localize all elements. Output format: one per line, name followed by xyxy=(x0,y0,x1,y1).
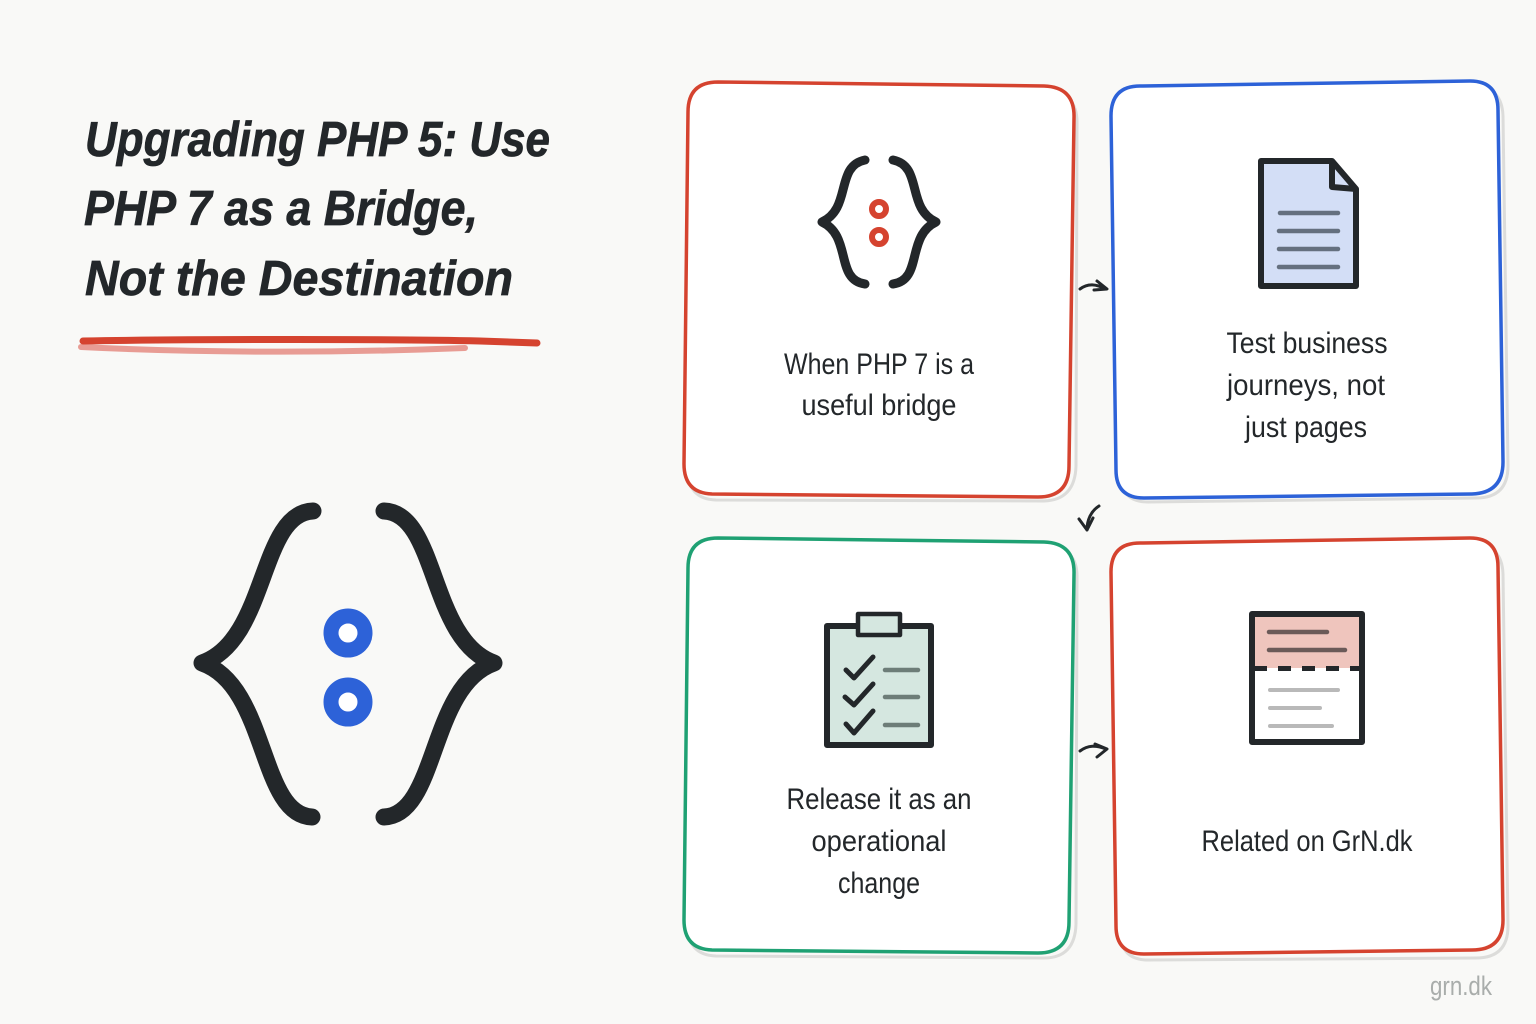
title: PHP 7 as a Bridge, xyxy=(84,182,478,236)
panel: when PHP 7 is a useful bridge xyxy=(684,82,1077,501)
title xyxy=(84,113,550,306)
icon: page split above the fold xyxy=(1252,614,1362,742)
icon: braces with red colon xyxy=(822,160,936,284)
caption xyxy=(786,783,972,900)
arrow: bottom row xyxy=(1080,744,1107,757)
caption: When PHP 7 is a xyxy=(784,348,974,381)
caption: operational xyxy=(812,825,946,858)
title: Not the Destination xyxy=(85,252,513,306)
caption: change xyxy=(838,867,920,900)
arrow: top row xyxy=(1080,281,1107,290)
caption: useful bridge xyxy=(802,389,956,422)
caption xyxy=(1226,327,1388,444)
caption: just pages xyxy=(1244,411,1367,444)
title underline xyxy=(81,340,537,352)
title: Upgrading PHP 5: Use xyxy=(85,113,550,167)
caption: journeys, not xyxy=(1226,369,1386,402)
caption: Related on GrN.dk xyxy=(1202,825,1413,858)
panel: release as operational change xyxy=(684,538,1077,958)
icon: checklist clipboard xyxy=(827,614,931,745)
caption xyxy=(784,348,974,422)
icon: document xyxy=(1261,161,1356,286)
watermark: grn.dk xyxy=(1430,971,1492,1001)
panel: test business journeys xyxy=(1111,81,1508,502)
arrow: down to second row xyxy=(1079,506,1099,530)
icon: large braces with colon xyxy=(202,511,494,817)
caption: Release it as an xyxy=(786,783,972,816)
panel: related on GrN.dk xyxy=(1111,538,1508,960)
caption: Test business xyxy=(1226,327,1388,360)
